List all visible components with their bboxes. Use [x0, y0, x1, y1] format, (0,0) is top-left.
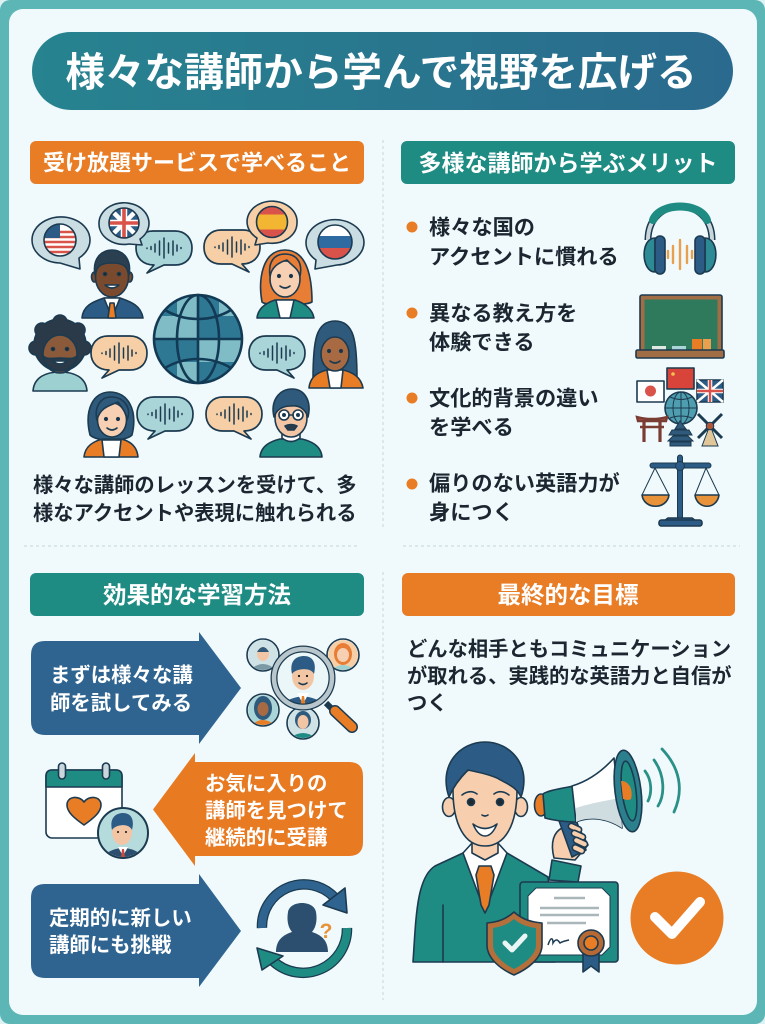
- flag bubble: Spain: [247, 201, 297, 245]
- person: man in suit: [82, 250, 143, 318]
- flag bubble: UK: [99, 203, 149, 245]
- certificate: [520, 882, 618, 972]
- person: woman with red hair: [257, 250, 314, 318]
- heading: final goal: [402, 573, 735, 616]
- icon: calendar with heart and teacher: [46, 763, 148, 858]
- text: lesson description: 様々な講師のレッスンを受けて、多: [33, 474, 356, 497]
- icon: globe: [154, 295, 242, 383]
- bullet: cultural background: を学べる: [429, 416, 514, 440]
- portrait: bob-haired woman: [288, 708, 318, 738]
- icon: teachers illustration with globe and speech bubbles: [29, 201, 364, 457]
- heading: final goal: 最終的な目標: [498, 582, 638, 608]
- portrait: glasses man: [248, 640, 278, 670]
- magnifier handle: [326, 703, 334, 711]
- shield with check: [487, 912, 542, 975]
- flag bubble: USA: [32, 217, 90, 269]
- arm and palm: [549, 826, 588, 882]
- panel: 受け放題サービスで学べること: [29, 141, 364, 525]
- fingers on handle: [567, 822, 589, 855]
- icon: chalkboard: [636, 295, 724, 358]
- heading: effective study: 効果的な学習方法: [103, 582, 291, 608]
- heading: 受け放題サービス: 受け放題サービスで学べること: [43, 150, 351, 176]
- bullet: accents: アクセントに慣れる: [429, 245, 619, 269]
- bullet: cultural background: 文化的背景の違い: [429, 386, 599, 410]
- arrow: step 3: [31, 874, 241, 987]
- bullet: accents: [406, 216, 619, 269]
- person: woman with bob hair: [84, 392, 138, 457]
- bullet: unbiased English: 身につく: [429, 500, 514, 524]
- magnifier lens with teacher: [274, 649, 332, 707]
- panel: 最終的な目標: [402, 573, 735, 975]
- bullet: accents: 様々な国の: [429, 216, 535, 240]
- title banner: 様々な講師から学んで視野を広げる: [65, 51, 697, 95]
- flag bubble: Russia: [306, 220, 364, 269]
- text: lesson description: [33, 474, 356, 525]
- text: goal description: つく: [407, 693, 448, 715]
- arrow: step 3: 定期的に新しい: [49, 907, 192, 930]
- arrow: step 2: 継続的に受講: [205, 826, 327, 850]
- illustration: teacher with megaphone: [413, 742, 679, 975]
- arrow: step 1: [31, 632, 241, 744]
- wave speech bubbles: [91, 230, 305, 439]
- text: goal description: [407, 638, 732, 715]
- bullet: cultural background: [406, 386, 599, 440]
- bullet: teaching styles: 体験できる: [429, 330, 535, 354]
- bullet: teaching styles: 異なる教え方を: [429, 302, 577, 326]
- icon: new teacher rotation cycle: ?: [320, 920, 332, 943]
- text: goal description: が取れる、実践的な英語力と自信が: [407, 664, 732, 688]
- icon: new teacher rotation cycle: [257, 884, 347, 973]
- arrow: step 3: 講師にも挑戦: [49, 934, 172, 957]
- person: man with afro: [29, 315, 91, 391]
- sound waves: [645, 749, 679, 812]
- icon: balance scale: [642, 455, 719, 526]
- text: lesson description: 様なアクセントや表現に触れられる: [33, 502, 356, 525]
- icon: headphones: [644, 206, 716, 274]
- arrow: step 1: まずは様々な講: [50, 664, 193, 687]
- arrow: step 2: 講師を見つけて: [205, 800, 348, 822]
- bullet: teaching styles: [406, 302, 577, 354]
- arrow: step 2: [153, 753, 363, 866]
- person: woman with long hair: [309, 321, 363, 388]
- icon: flags and world culture: [637, 368, 723, 446]
- heading: effective study: [30, 573, 364, 616]
- panel: 多様な講師から学ぶメリット: [401, 141, 735, 526]
- arrow: step 1: 師を試してみる: [50, 692, 192, 715]
- portrait: long-haired woman: [248, 695, 278, 726]
- arrow: step 2: お気に入りの: [205, 772, 327, 796]
- title banner: [32, 32, 733, 110]
- megaphone: [534, 749, 646, 857]
- bullet: unbiased English: 偏りのない英語力が: [429, 470, 620, 496]
- bullet: unbiased English: [406, 470, 620, 524]
- text: goal description: どんな相手ともコミュニケーション: [407, 638, 731, 661]
- heading: merits: 多様な講師から学ぶメリット: [418, 150, 718, 176]
- person: man with glasses: [260, 389, 322, 457]
- heading: merits: [401, 141, 735, 184]
- man body: [413, 853, 555, 962]
- icon: magnifier over teacher portraits: [247, 639, 359, 739]
- man head: [442, 742, 528, 860]
- panel: 効果的な学習方法: [30, 573, 364, 987]
- portrait: red-haired woman: [328, 640, 358, 670]
- icon: orange check badge: [630, 872, 724, 964]
- heading: 受け放題サービス: [30, 141, 364, 184]
